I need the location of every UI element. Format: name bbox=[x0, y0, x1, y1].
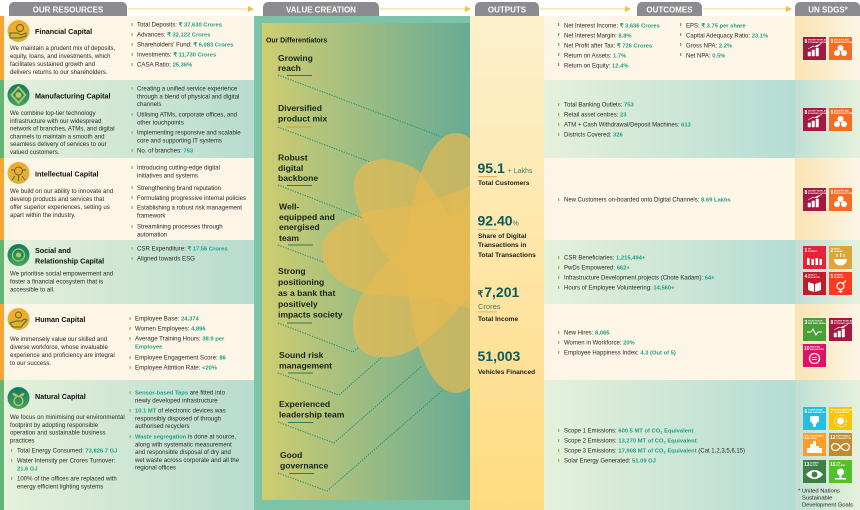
icons: SDGs financial row: DECENT WORK AND bbox=[808, 38, 828, 42]
icons: SDGs social row: NO bbox=[808, 248, 811, 250]
differentiator: strong positioning: positively bbox=[278, 299, 318, 309]
list: manufacturing outcomes: Districts Covered: 326 bbox=[564, 132, 623, 138]
list: natural capital consumption bbox=[11, 448, 117, 490]
icons: SDGs natural row: 11 bbox=[804, 435, 810, 441]
stat: vehicles financed: Vehicles Financed bbox=[478, 369, 535, 376]
icons: SDGs financial row: 8 bbox=[804, 39, 808, 45]
icons: SDGs manufacturing row: INFRASTRUCTURE bbox=[834, 112, 853, 115]
differentiator: experienced leadership team: Experienced bbox=[279, 399, 330, 409]
text: financial capital description: delivers returns to our shareholders. bbox=[10, 69, 108, 76]
list: financial outcomes: Return on Assets: 1.7% bbox=[564, 54, 626, 60]
list: intellectual capital metrics: Strengthening brand reputation bbox=[137, 185, 221, 192]
list: financial capital metrics: Investments: ₹ 11,730 Crores bbox=[137, 52, 216, 58]
panel: intellectual capital bbox=[8, 162, 246, 238]
differentiator: good governance: Good bbox=[280, 450, 302, 460]
heading: manufacturing capital: Manufacturing Capital bbox=[35, 92, 110, 100]
list: financial outcomes: Net NPA: 0.5% bbox=[686, 54, 725, 60]
heading: financial capital: Financial Capital bbox=[35, 27, 92, 36]
stat: total customers: Total Customers bbox=[478, 180, 530, 187]
panel: manufacturing capital bbox=[8, 84, 241, 156]
list: human outcomes bbox=[558, 330, 676, 356]
differentiator: strong positioning bbox=[278, 266, 343, 324]
list: natural outcomes: 2 bbox=[663, 450, 666, 454]
icons: SDGs natural row: AND SANITATION bbox=[808, 411, 825, 414]
list: natural capital consumption: 21.6 GJ bbox=[17, 466, 38, 472]
differentiator: experienced leadership team bbox=[279, 399, 345, 423]
icons: SDGs human row: GOOD HEALTH bbox=[808, 320, 823, 322]
stat: total income: Total Income bbox=[478, 316, 519, 323]
icons: SDGs social row bbox=[803, 246, 852, 295]
list: social outcomes: Hours of Employee Volunteering: 14,560+ bbox=[564, 286, 675, 292]
icons: SDGs manufacturing row: 8 bbox=[804, 110, 808, 116]
differentiator: robust digital backbone: backbone bbox=[278, 173, 318, 183]
stat: digital transactions share bbox=[478, 212, 536, 259]
icons: SDGs social row: EDUCATION bbox=[808, 276, 820, 279]
list: human capital metrics: Employee Engagement Score: 86 bbox=[135, 354, 227, 362]
arrow: outputs to outcomes bbox=[540, 6, 631, 12]
stat: vehicles financed: 51,003 bbox=[478, 348, 521, 364]
list: natural capital initiatives: Sensor-based Taps are fitted into bbox=[135, 390, 225, 396]
panel: value creation bbox=[254, 16, 470, 510]
list: human capital metrics: Employee Attrition Rate: <20% bbox=[135, 364, 217, 372]
list: financial capital metrics bbox=[132, 22, 234, 68]
stat: total customers bbox=[478, 160, 533, 187]
list: natural capital consumption: 100% of the offices are replaced with bbox=[17, 476, 117, 482]
heading: social and relationship capital: Relationship Capital bbox=[35, 256, 104, 266]
column header: our resources bbox=[9, 2, 127, 16]
text: natural capital description: We focus on minimising our environmental bbox=[10, 414, 125, 421]
list: financial capital metrics: Total Deposits: ₹ 37,630 Crores bbox=[137, 22, 222, 28]
icons: SDGs natural row: ON LAND bbox=[836, 464, 846, 467]
list: natural outcomes: 2 bbox=[660, 430, 663, 434]
icons: SDGs social row: GENDER bbox=[834, 274, 843, 276]
icons: SDGs natural row: CLEAN WATER bbox=[808, 408, 823, 412]
heading: social and relationship capital: Social and bbox=[35, 246, 71, 255]
icons: SDGs natural row bbox=[803, 407, 853, 483]
differentiator: strong positioning: as a bank that bbox=[278, 288, 335, 298]
list: natural capital consumption: Water Intensity per Crores Turnover: bbox=[17, 458, 116, 464]
column header: our resources: OUR RESOURCES bbox=[33, 5, 104, 14]
list: natural capital initiatives: along with systematic measurement bbox=[135, 441, 232, 448]
stat: digital transactions share: Total Transactions bbox=[478, 252, 536, 259]
icons: SDGs intellectual row: 8 bbox=[804, 190, 808, 196]
icons: SDGs human row: 8 bbox=[830, 320, 834, 326]
differentiator: well-equipped and energised team: Well- bbox=[279, 202, 300, 212]
list: natural capital initiatives: responsibly disposed of through bbox=[135, 415, 221, 422]
differentiator: experienced leadership team: leadership team bbox=[279, 410, 345, 420]
differentiator: diversified product mix: Diversified bbox=[278, 103, 322, 113]
list: manufacturing capital metrics: channels bbox=[137, 101, 161, 108]
stat: digital transactions share: 92.40% bbox=[478, 212, 519, 228]
list: intellectual capital metrics bbox=[132, 164, 246, 238]
text: manufacturing capital description: channels to maintain a smooth and bbox=[10, 133, 105, 140]
list: human capital metrics: Average Training Hours: 38.9 per bbox=[135, 336, 225, 342]
text: natural capital description: operation and sustainable business bbox=[10, 430, 106, 437]
differentiator: diversified product mix bbox=[278, 103, 327, 128]
list: manufacturing capital metrics: other touchpoints bbox=[137, 119, 184, 126]
list: natural capital initiatives: Waste segregation is done at source, bbox=[135, 434, 236, 440]
icons: SDGs natural row: LIFE bbox=[836, 462, 841, 464]
icons: SDGs natural row: 6 bbox=[804, 409, 808, 415]
column header: UN SDGs bbox=[795, 2, 860, 16]
icons: SDGs human row bbox=[803, 318, 855, 367]
icons: SDGs natural row: 12 bbox=[830, 435, 836, 441]
icons: SDGs human row: AND WELL-BEING bbox=[808, 322, 826, 325]
differentiator: strong positioning: impacts society bbox=[278, 310, 343, 320]
list: financial outcomes: EPS: ₹ 3.75 per share bbox=[686, 22, 746, 30]
icons: SDGs manufacturing row: ECONOMIC GROWTH bbox=[808, 113, 829, 115]
list: intellectual capital metrics: automation bbox=[137, 231, 167, 238]
differentiator: good governance: governance bbox=[280, 460, 328, 470]
list: natural capital initiatives: and responsible disposal of dry and bbox=[135, 449, 231, 456]
text: manufacturing capital description: We combine top-tier technology bbox=[10, 110, 97, 117]
icons: SDGs natural row: SUSTAINABLE bbox=[810, 434, 825, 438]
differentiator: robust digital backbone: digital bbox=[278, 163, 303, 173]
icon: natural capital bbox=[8, 387, 30, 409]
differentiator: sound risk management bbox=[279, 350, 332, 374]
column header: value creation bbox=[263, 2, 379, 16]
list: human outcomes: Women in Workforce: 20% bbox=[564, 340, 635, 346]
differentiator: sound risk management: management bbox=[279, 360, 332, 370]
text: manufacturing capital description: seamless delivery of services to our bbox=[10, 141, 107, 148]
icons: SDGs human row: 10 bbox=[804, 346, 810, 352]
icons: SDGs manufacturing row bbox=[803, 108, 853, 131]
icon: financial capital bbox=[8, 20, 30, 42]
list: manufacturing outcomes: ATM + Cash Withdrawal/Deposit Machines: 613 bbox=[564, 122, 692, 128]
icons: SDGs natural row: AFFORDABLE AND bbox=[834, 408, 853, 412]
icons: SDGs human row: DECENT WORK AND bbox=[834, 320, 854, 322]
footnote: UN SDGs: Development Goals bbox=[802, 502, 853, 508]
list: natural outcomes: Equivalent bbox=[662, 428, 693, 434]
arrow: value creation to outputs bbox=[380, 6, 471, 12]
icon: manufacturing capital bbox=[8, 84, 30, 106]
icons: SDGs social row: QUALITY bbox=[808, 274, 817, 276]
list: intellectual capital metrics: Streamlining processes through bbox=[137, 224, 223, 230]
list: intellectual capital metrics: Establishing a robust risk management bbox=[137, 204, 242, 212]
icons: SDGs intellectual row: INFRASTRUCTURE bbox=[834, 192, 853, 195]
list: social outcomes: Infrastructure Development projects (Chote Kadam): 64+ bbox=[564, 276, 715, 282]
icons: SDGs social row: ZERO bbox=[834, 248, 840, 250]
footnote: UN SDGs: Sustainable bbox=[802, 496, 832, 502]
differentiator: growing reach: reach bbox=[278, 63, 301, 73]
text: manufacturing capital description: infrastructure with our widespread bbox=[10, 118, 101, 125]
icons: SDGs social row: POVERTY bbox=[808, 251, 818, 253]
list: natural outcomes: Equivalent bbox=[666, 438, 697, 444]
column header: value creation: VALUE CREATION bbox=[286, 5, 356, 14]
text: human capital description: to our success. bbox=[10, 360, 51, 367]
text: manufacturing capital description: network of branches, ATMs, and digital bbox=[10, 126, 115, 133]
column header: UN SDGs: UN SDGS* bbox=[808, 5, 849, 14]
text: financial capital description: We maintain a prudent mix of deposits, bbox=[10, 45, 116, 52]
list: intellectual capital metrics: Formulating progressive internal policies bbox=[137, 195, 246, 202]
arrow: resources to value creation bbox=[128, 6, 254, 12]
icons: SDGs social row: 4 bbox=[804, 274, 808, 280]
icons: SDGs manufacturing row: INDUSTRY AND bbox=[834, 110, 849, 112]
list: financial capital metrics: Advances: ₹ 32,122 Crores bbox=[137, 32, 210, 38]
text: intellectual capital description: We build on our ability to innovate and bbox=[10, 188, 113, 195]
list: natural capital initiatives: wet waste across corporate and all the bbox=[134, 457, 240, 464]
footnote: UN SDGs: * United Nations bbox=[798, 488, 840, 494]
list: human outcomes: Employee Happiness Index: 4.3 (Out of 5) bbox=[564, 350, 676, 356]
panel: human capital bbox=[8, 308, 227, 372]
list: natural capital consumption: energy efficient lighting systems bbox=[17, 484, 103, 490]
list: human capital metrics: Employee bbox=[135, 344, 163, 350]
list: social capital metrics: Aligned towards ESG bbox=[137, 256, 195, 262]
icons: SDGs social row: 1 bbox=[804, 248, 808, 254]
list: manufacturing capital metrics: Utilising ATMs, corporate offices, and bbox=[137, 112, 237, 118]
icon: intellectual capital bbox=[8, 162, 30, 184]
stat: vehicles financed bbox=[478, 348, 535, 376]
icons: SDGs natural row: RESPONSIBLE bbox=[836, 436, 851, 438]
list: manufacturing outcomes: Total Banking Outlets: 753 bbox=[564, 102, 634, 108]
heading: our differentiators: Our Differentiators bbox=[266, 38, 327, 44]
list: natural outcomes: Scope 3 Emissions: 17,908 MT of CO bbox=[564, 448, 663, 454]
differentiator: diversified product mix: product mix bbox=[278, 114, 327, 124]
differentiator: well-equipped and energised team: team bbox=[279, 233, 299, 243]
differentiator: growing reach bbox=[278, 53, 313, 76]
icons: SDGs social row: EQUALITY bbox=[834, 276, 845, 279]
heading: human capital: Human Capital bbox=[35, 315, 85, 324]
list: natural outcomes bbox=[558, 428, 745, 464]
icons: SDGs financial row: ECONOMIC GROWTH bbox=[808, 42, 829, 44]
list: financial outcomes bbox=[558, 22, 768, 70]
panel: outputs bbox=[470, 16, 544, 510]
list: natural outcomes: 2 bbox=[663, 440, 666, 444]
text: intellectual capital description: offer superior experiences, setting us bbox=[10, 204, 110, 211]
differentiator: strong positioning: Strong bbox=[278, 266, 306, 276]
icons: SDGs financial row: INFRASTRUCTURE bbox=[834, 41, 853, 44]
differentiator: well-equipped and energised team bbox=[279, 202, 335, 246]
icons: SDGs intellectual row: 9 bbox=[830, 190, 834, 196]
heading: intellectual capital: Intellectual Capital bbox=[35, 170, 99, 178]
text: manufacturing capital description: valued customers. bbox=[10, 149, 60, 156]
list: financial outcomes: Gross NPA: 2.2% bbox=[686, 44, 732, 50]
icons: SDGs human row: INEQUALITIES bbox=[810, 348, 825, 351]
icons: SDGs financial row: 9 bbox=[830, 39, 834, 45]
list: financial outcomes: Return on Equity: 12.4% bbox=[564, 64, 628, 70]
list: financial outcomes: Net Profit after Tax: ₹ 726 Crores bbox=[564, 42, 652, 50]
column header: outcomes bbox=[637, 2, 702, 16]
icons: SDGs social row: HUNGER bbox=[834, 251, 843, 253]
list: natural capital initiatives: newly developed infrastructure bbox=[135, 397, 218, 404]
list: intellectual outcomes: New Customers on-boarded onto Digital Channels: 8.69 Lakhs bbox=[564, 198, 731, 204]
icons: SDGs natural row: CONSUMPTION bbox=[836, 438, 852, 440]
list: human outcomes: New Hires: 8,065 bbox=[564, 330, 610, 336]
icons: SDGs manufacturing row: DECENT WORK AND bbox=[808, 110, 828, 112]
icons: SDGs natural row: 13 bbox=[804, 462, 810, 468]
text: financial capital description: equity, loans, and investments, which bbox=[10, 53, 110, 60]
list: manufacturing outcomes: Retail asset centres: 23 bbox=[564, 112, 627, 118]
list: human capital metrics: Employee Base: 24,374 bbox=[135, 316, 200, 322]
text: human capital description: diverse workforce, whose invaluable bbox=[10, 344, 108, 351]
icons: SDGs natural row: 15 bbox=[830, 462, 836, 468]
icons: SDGs human row: ECONOMIC GROWTH bbox=[834, 323, 855, 325]
list: manufacturing capital metrics bbox=[132, 86, 241, 154]
list: natural capital consumption: Total Energy Consumed: 73,826.7 GJ bbox=[17, 448, 117, 454]
icons: SDGs intellectual row bbox=[803, 188, 853, 211]
icons: SDGs natural row: ACTION bbox=[810, 464, 818, 467]
list: financial outcomes: Net Interest Income: ₹ 3,636 Crores bbox=[564, 22, 660, 30]
list: social capital metrics: CSR Expenditure: ₹ 17.56 Crores bbox=[137, 246, 228, 252]
differentiator: sound risk management: Sound risk bbox=[279, 350, 324, 360]
stat: total income: Crores bbox=[478, 302, 501, 311]
list: financial capital metrics: CASA Ratio: 25.36% bbox=[137, 62, 192, 68]
differentiator: robust digital backbone: Robust bbox=[278, 152, 308, 162]
icons: SDGs intellectual row: INDUSTRY AND bbox=[834, 190, 849, 192]
list: human capital metrics bbox=[130, 316, 227, 372]
list: natural outcomes: (Cat 1,2,3,5,6,15) bbox=[698, 448, 745, 454]
icons: SDGs natural row: CLEAN ENERGY bbox=[834, 411, 851, 414]
list: financial capital metrics: Shareholders' Fund: ₹ 6,083 Crores bbox=[137, 42, 234, 48]
list: intellectual capital metrics: initiatives and systems bbox=[137, 172, 198, 179]
text: human capital description: experience and proficiency are integral bbox=[10, 352, 115, 359]
chart: overlapping petals bbox=[322, 133, 470, 393]
text: intellectual capital description: apart within the industry. bbox=[10, 212, 76, 219]
text: social capital description: accessible to all. bbox=[10, 286, 55, 294]
panel: social and relationship capital bbox=[8, 244, 228, 294]
icons: SDGs human row: REDUCED bbox=[810, 346, 820, 348]
list: natural capital initiatives: authorised recyclers bbox=[135, 423, 190, 430]
column header: outcomes: OUTCOMES bbox=[646, 5, 693, 14]
list: natural capital initiatives bbox=[130, 390, 240, 472]
list: manufacturing outcomes bbox=[558, 102, 692, 138]
stat: digital transactions share: Share of Digital bbox=[478, 233, 527, 240]
icons: SDGs financial row bbox=[803, 37, 853, 60]
list: natural capital initiatives: regional offices bbox=[135, 465, 176, 472]
list: manufacturing capital metrics: No. of branches: 753 bbox=[137, 148, 193, 154]
icons: SDGs human row: 3 bbox=[804, 320, 808, 326]
icons: SDGs intellectual row: ECONOMIC GROWTH bbox=[808, 193, 829, 195]
list: intellectual capital metrics: Introducing cutting-edge digital bbox=[137, 164, 220, 172]
list: human capital metrics: Women Employees: 4,896 bbox=[135, 326, 206, 332]
stat: total customers: 95.1 + Lakhs bbox=[478, 160, 533, 176]
icons: SDGs natural row: CITIES bbox=[810, 438, 817, 440]
panel: financial capital bbox=[8, 20, 234, 76]
text: natural capital description: practices bbox=[10, 437, 34, 444]
heading: natural capital: Natural Capital bbox=[35, 392, 86, 401]
icons: SDGs natural row: 7 bbox=[830, 409, 834, 415]
stat: total income bbox=[478, 284, 519, 323]
icons: SDGs natural row: CLIMATE bbox=[810, 462, 819, 464]
list: natural outcomes: Equivalent bbox=[666, 448, 697, 454]
text: natural capital description: footprint by adopting responsible bbox=[10, 422, 99, 429]
differentiator: well-equipped and energised team: equipped and bbox=[279, 212, 335, 222]
list: social capital metrics bbox=[132, 246, 228, 262]
list: natural capital initiatives: 10.1 MT of electronic devices was bbox=[135, 408, 226, 414]
text: social capital description: We prioritise social empowerment and bbox=[10, 270, 113, 278]
differentiator: good governance bbox=[280, 450, 328, 474]
stat: digital transactions share: Transactions in bbox=[478, 242, 526, 249]
text: financial capital description: facilitates sustained growth and bbox=[10, 61, 95, 68]
icon: social capital bbox=[8, 244, 30, 266]
list: financial outcomes: Capital Adequacy Ratio: 23.1% bbox=[686, 34, 768, 40]
list: social outcomes: PwDs Empowered: 662+ bbox=[564, 266, 630, 272]
icon: human capital bbox=[8, 308, 30, 330]
column header: outputs: OUTPUTS bbox=[488, 5, 527, 14]
arrow: outcomes to SDGs bbox=[703, 6, 792, 12]
stat: total income: ₹7,201 bbox=[478, 284, 519, 300]
panel: natural capital bbox=[8, 387, 240, 490]
differentiator: robust digital backbone bbox=[278, 152, 318, 186]
list: natural outcomes: Scope 1 Emissions: 600.5 MT of CO bbox=[564, 428, 660, 434]
list: manufacturing capital metrics: core and supporting IT systems bbox=[137, 137, 222, 144]
differentiator: growing reach: Growing bbox=[278, 53, 313, 63]
icons: SDGs social row: 5 bbox=[830, 274, 834, 280]
column header: outputs bbox=[475, 2, 539, 16]
differentiator: strong positioning: positioning bbox=[278, 277, 324, 287]
icons: SDGs financial row: INDUSTRY AND bbox=[834, 38, 849, 42]
list: natural outcomes: Scope 2 Emissions: 13,270 MT of CO bbox=[564, 438, 663, 444]
icons: SDGs intellectual row: DECENT WORK AND bbox=[808, 190, 828, 192]
list: manufacturing capital metrics: Implementing responsive and scalable bbox=[137, 130, 241, 136]
icons: SDGs social row: 2 bbox=[830, 248, 834, 254]
list: intellectual capital metrics: framework bbox=[137, 212, 166, 219]
differentiator: well-equipped and energised team: energised bbox=[279, 222, 320, 232]
list: manufacturing capital metrics: Creating a unified service experience bbox=[137, 86, 238, 92]
text: human capital description: We immensely value our skilled and bbox=[10, 336, 107, 343]
list: social outcomes: CSR Beneficiaries: 1,215,494+ bbox=[564, 256, 646, 262]
list: financial outcomes: Net Interest Margin: 8.8% bbox=[564, 34, 632, 40]
list: natural outcomes: Solar Energy Generated: 51.09 GJ bbox=[564, 458, 656, 464]
list: social outcomes bbox=[558, 256, 715, 292]
text: social capital description: foster a financial ecosystem that is bbox=[10, 278, 103, 286]
list: manufacturing capital metrics: through a blend of physical and digital bbox=[137, 93, 239, 100]
icons: SDGs manufacturing row: 9 bbox=[830, 110, 834, 116]
text: intellectual capital description: develop products and services that bbox=[10, 196, 104, 203]
connectors: dotted lines bbox=[278, 75, 443, 491]
